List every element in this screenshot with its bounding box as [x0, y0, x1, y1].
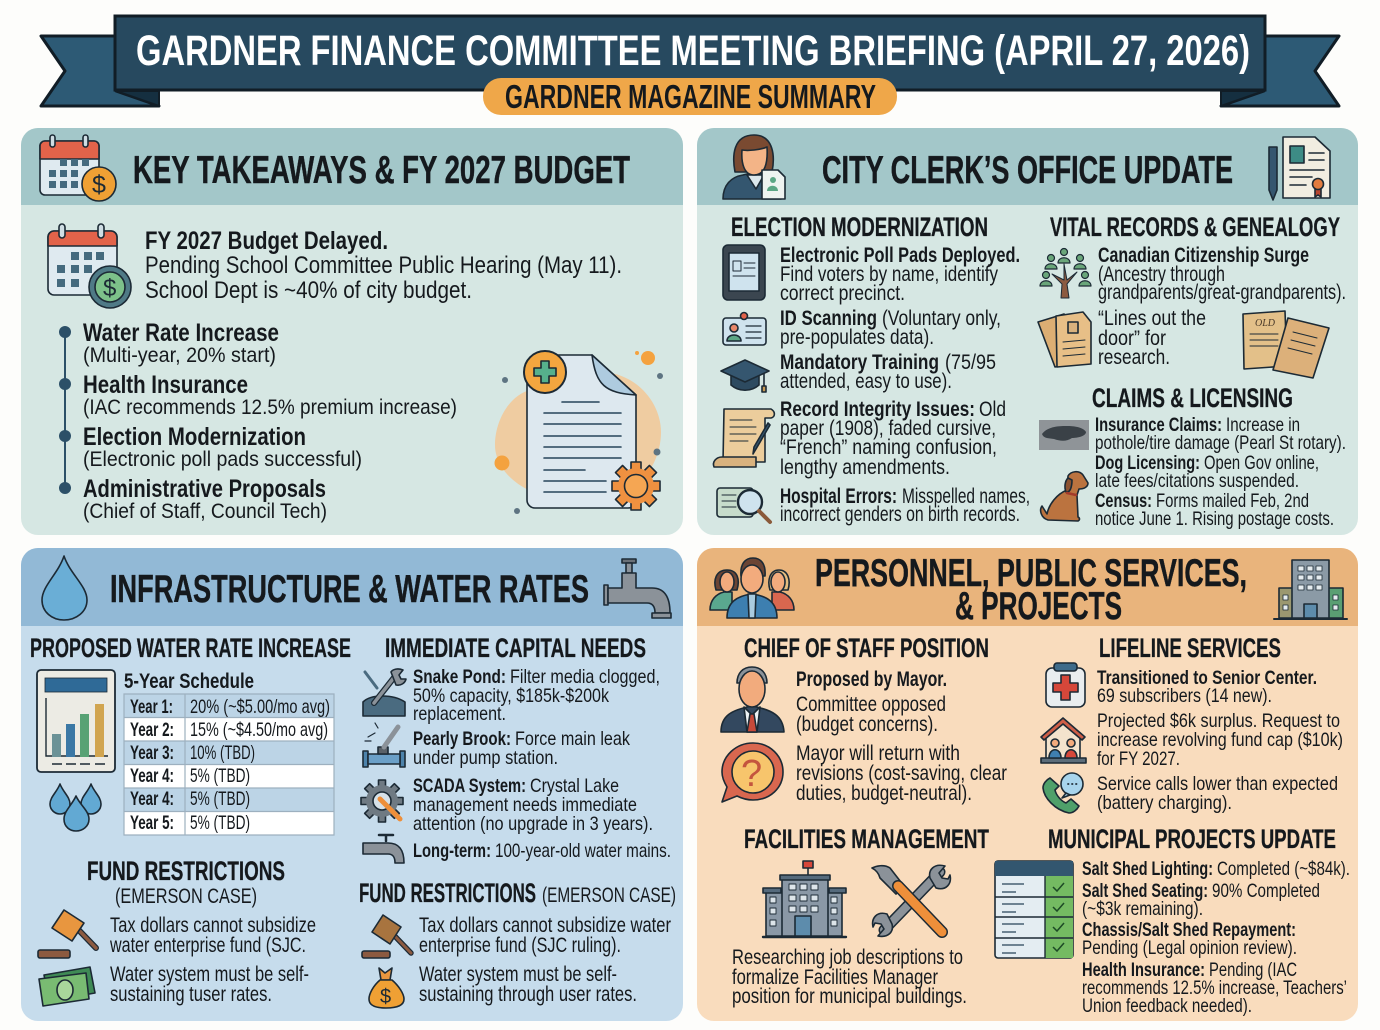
text: hospital errors: Hospital Errors:: [780, 484, 897, 508]
text: mayor revisions: duties, budget-neutral).: [796, 782, 972, 805]
timeline: Administrative Proposals: [83, 475, 326, 503]
text: hospital errors: incorrect genders on birth records.: [780, 503, 1020, 526]
text: insurance claims: Insurance Claims:: [1095, 414, 1222, 436]
icon: crossed hammer and wrench: [872, 865, 950, 936]
text: dog licensing: [1095, 452, 1319, 492]
text: mandatory training: (75/95: [945, 351, 996, 374]
subheading: proposed water rate increase: PROPOSED WATER RATE INCREASE: [30, 633, 351, 663]
text: budget delayed: FY 2027 Budget Delayed.: [145, 227, 388, 255]
text: dog licensing: Open Gov online,: [1204, 452, 1319, 474]
text: self-sustaining left: [110, 963, 309, 1006]
icon: money bag: $: [380, 986, 391, 1008]
text: tax dollars left: water enterprise fund (SJC.: [109, 934, 306, 957]
text: record integrity: lengthy amendments.: [780, 456, 950, 479]
icon: gavel: [38, 910, 96, 958]
icon: medical alert kit: [1046, 663, 1085, 707]
icon: question bubble: ?: [741, 753, 762, 795]
timeline: (Multi-year, 20% start): [83, 344, 276, 367]
icon: scroll and quill: [713, 409, 774, 467]
text: lines out the door: “Lines out the: [1098, 307, 1206, 330]
text: salt shed seating: 90% Completed: [1212, 880, 1320, 902]
text: self-sustaining left: Water system must be self-: [110, 963, 309, 986]
text: proposed by mayor: [796, 667, 947, 736]
icon: paper records: [1038, 312, 1091, 367]
text: snake pond: replacement.: [413, 703, 506, 725]
text: service calls: (battery charging).: [1097, 792, 1232, 814]
text: self-sustaining right: [419, 963, 637, 1006]
text: tax dollars right: Tax dollars cannot subsidize water: [419, 914, 671, 937]
text: snake pond: [413, 666, 660, 725]
text: service calls: Service calls lower than expected: [1097, 773, 1338, 795]
text: surplus: [1097, 710, 1343, 770]
icon: SCADA gear and wrench: [361, 780, 403, 822]
text: self-sustaining right: sustaining through user rates.: [419, 983, 637, 1006]
table: 5-year schedule: Year 2:: [130, 719, 174, 741]
text: pearly brook: [413, 728, 630, 769]
text: poll pads: [780, 243, 1020, 305]
text: tax dollars right: enterprise fund (SJC ruling).: [419, 934, 621, 957]
subheading: fund restrictions left: (EMERSON CASE): [115, 885, 257, 908]
text: snake pond: 50% capacity, $185k-$200k: [413, 685, 609, 707]
icon: tablet: [723, 245, 765, 300]
heading: KEY TAKEAWAYS & FY 2027 BUDGET: [133, 149, 630, 192]
text: mandatory training: [780, 350, 996, 393]
text: hospital errors: [780, 484, 1030, 526]
text: record integrity: Record Integrity Issues:: [780, 397, 975, 421]
text: facilities manager: formalize Facilities Manager: [732, 966, 938, 989]
text: poll pads: Electronic Poll Pads Deployed.: [780, 243, 1020, 267]
text: surplus: for FY 2027.: [1097, 748, 1180, 770]
text: tax dollars left: [109, 914, 316, 957]
subheading: fund restrictions right: (EMERSON CASE): [542, 884, 676, 907]
icon: calendar with dollar coin: [40, 135, 116, 201]
icon: pothole: [1039, 420, 1089, 450]
icon: magnifier over record: [717, 488, 770, 522]
subheading: election modernization: ELECTION MODERNIZATION: [731, 212, 988, 242]
icon: city buildings: [1274, 560, 1347, 619]
text: ID scanning: pre-populates data).: [780, 326, 934, 349]
icon: bar chart report: [37, 670, 115, 772]
text: proposed by mayor: (budget concerns).: [796, 713, 938, 736]
text: proposed by mayor: Committee opposed: [796, 693, 946, 716]
subheading: fund restrictions left: [87, 856, 285, 908]
timeline: (Electronic poll pads successful): [83, 448, 362, 471]
text: mayor revisions: Mayor will return with: [796, 742, 960, 765]
text: lines out the door: [1098, 307, 1206, 369]
subheading: immediate capital needs: IMMEDIATE CAPITAL NEEDS: [385, 633, 646, 663]
timeline: Water Rate Increase: [83, 319, 279, 347]
subheading: fund restrictions right: FUND RESTRICTIONS: [359, 878, 536, 908]
text: mayor revisions: revisions (cost-saving, clear: [796, 762, 1007, 785]
icon: water drops: [50, 784, 101, 831]
subheading: lifeline services: LIFELINE SERVICES: [1099, 633, 1281, 663]
icon: money bills: [39, 967, 95, 1006]
text: budget delayed: [145, 227, 622, 304]
icon: budget calendar: [48, 224, 131, 308]
text: scada system: [413, 775, 653, 835]
text: scada system: SCADA System:: [413, 775, 526, 797]
heading: & PROJECTS: [955, 585, 1122, 628]
text: long-term mains: 100-year-old water mains.: [495, 840, 671, 862]
table: 5-year schedule: 5% (TBD): [190, 788, 250, 810]
table: 5-year schedule: 15% (~$4.50/mo avg): [190, 719, 328, 741]
text: record integrity: Old: [979, 398, 1006, 421]
icon: municipal building: [763, 861, 846, 937]
text: mandatory training: attended, easy to use).: [780, 370, 952, 393]
icon: money bag: [369, 968, 404, 1008]
text: record integrity: paper (1908), faded cursive,: [780, 417, 996, 440]
text: census: Forms mailed Feb, 2nd: [1156, 490, 1309, 512]
icon: ID card: [723, 312, 766, 345]
text: chassis repayment: Chassis/Salt Shed Repayment:: [1082, 919, 1296, 941]
text: mayor revisions: [796, 742, 1007, 805]
icon: question bubble: [722, 743, 783, 802]
panel: infrastructure and water rates: [21, 548, 683, 1021]
text: chassis repayment: [1082, 919, 1297, 959]
text: ID scanning: (Voluntary only,: [882, 307, 1001, 330]
panel: personnel, public services and projects: [697, 548, 1358, 1021]
subheading: claims and licensing: CLAIMS & LICENSING: [1092, 383, 1293, 413]
text: facilities manager: position for municipal buildings.: [732, 985, 967, 1008]
text: record integrity: [780, 397, 1006, 479]
icon: wrench and filter: [363, 669, 406, 716]
text: citizenship surge: Canadian Citizenship Surge: [1098, 243, 1309, 267]
text: scada system: management needs immediate: [413, 794, 637, 816]
text: proposed by mayor: Proposed by Mayor.: [796, 667, 947, 691]
icon: faucet: [604, 559, 671, 618]
text: lines out the door: door” for: [1098, 327, 1166, 350]
subheading: fund restrictions left: FUND RESTRICTIONS: [87, 856, 285, 886]
table: 5-year schedule: Year 5:: [130, 812, 174, 834]
icon: checklist: [995, 861, 1073, 958]
icon: businessman: [721, 667, 784, 732]
table: 5-year schedule: [124, 669, 334, 835]
text: snake pond: Filter media clogged,: [510, 666, 660, 688]
table: 5-year schedule: Year 1:: [130, 696, 173, 718]
table: 5-year schedule: 5% (TBD): [190, 812, 250, 834]
text: citizenship surge: [1098, 243, 1346, 304]
text: long-term mains: [413, 840, 671, 862]
timeline: Election Modernization: [83, 423, 306, 451]
table: 5-year schedule: Year 4:: [130, 788, 174, 810]
timeline: (Chief of Staff, Council Tech): [83, 500, 327, 523]
text: senior center: Transitioned to Senior Center.: [1097, 667, 1317, 689]
icon: budget calendar: $: [103, 275, 116, 302]
icon: water drop: [42, 556, 87, 620]
icon: calendar with dollar coin: $: [92, 171, 106, 199]
subheading: chief of staff: CHIEF OF STAFF POSITION: [744, 633, 989, 663]
text: long-term mains: Long-term:: [413, 840, 491, 862]
text: self-sustaining left: sustaining tuser rates.: [110, 983, 272, 1006]
text: salt shed lighting: [1082, 858, 1350, 880]
text: dog licensing: Dog Licensing:: [1095, 452, 1200, 474]
title banner: [41, 16, 1339, 106]
text: salt shed seating: Salt Shed Seating:: [1082, 880, 1208, 902]
text: health insurance: Pending (IAC: [1209, 959, 1297, 981]
text: record integrity: “French” naming confusion,: [780, 436, 997, 459]
icon: document with plus and gear: [494, 351, 663, 514]
text: chassis repayment: Pending (Legal opinion review).: [1082, 937, 1297, 959]
icon: group of people: [710, 558, 794, 618]
text: hospital errors: Misspelled names,: [902, 485, 1030, 508]
text: insurance claims: Increase in: [1226, 414, 1300, 436]
text: scada system: attention (no upgrade in 3 years).: [413, 813, 653, 835]
text: health insurance: [1082, 959, 1347, 1017]
icon: family tree: [1040, 248, 1091, 298]
text: insurance claims: [1095, 414, 1346, 454]
text: census: Census:: [1095, 490, 1152, 512]
text: ID scanning: [780, 306, 1001, 349]
icon: pen and certificate: [1269, 137, 1330, 200]
icon: dog: [1041, 472, 1088, 521]
text: poll pads: correct precinct.: [780, 282, 905, 305]
text: census: [1095, 490, 1334, 530]
timeline: Health Insurance: [83, 371, 248, 399]
panel: city clerk office update: [697, 128, 1358, 535]
table: 5-year schedule: 5% (TBD): [190, 765, 250, 787]
text: budget delayed: Pending School Committee Public Hearing (May 11).: [145, 252, 622, 279]
subheading: facilities management: FACILITIES MANAGEMENT: [744, 824, 989, 854]
icon: tap: [363, 835, 404, 863]
text: ID scanning: ID Scanning: [780, 306, 877, 330]
subtitle pill: GARDNER MAGAZINE SUMMARY: [505, 78, 876, 115]
table: 5-year schedule: 20% (~$5.00/mo avg): [190, 696, 330, 718]
text: salt shed seating: [1082, 880, 1320, 920]
text: snake pond: Snake Pond:: [413, 666, 506, 688]
table: 5-year schedule: Year 3:: [130, 742, 174, 764]
table: 5-year schedule: 10% (TBD): [190, 742, 255, 764]
icon: old documents: [1243, 311, 1329, 378]
icon: leaking pipe valve: [363, 723, 405, 767]
text: pearly brook: Pearly Brook:: [413, 728, 511, 750]
text: poll pads: Find voters by name, identify: [780, 263, 998, 286]
text: salt shed lighting: Salt Shed Lighting:: [1082, 858, 1213, 880]
panel: key takeaways and budget: [21, 128, 683, 535]
text: tax dollars right: [419, 914, 671, 957]
text: lines out the door: research.: [1098, 346, 1170, 369]
icon: old documents: OLD: [1255, 318, 1276, 329]
table: 5-year schedule: Year 4:: [130, 765, 174, 787]
text: tax dollars left: Tax dollars cannot subsidize: [110, 914, 316, 937]
text: self-sustaining right: Water system must be self-: [419, 963, 617, 986]
icon: graduation cap: [721, 360, 769, 392]
text: pearly brook: under pump station.: [413, 747, 558, 769]
icon: clerk woman: [723, 135, 785, 199]
heading: INFRASTRUCTURE & WATER RATES: [110, 568, 589, 611]
text: facilities manager: [732, 946, 967, 1008]
heading: [815, 552, 1247, 628]
text: health insurance: Union feedback needed).: [1082, 995, 1252, 1017]
text: service calls: [1097, 773, 1338, 814]
text: mandatory training: Mandatory Training: [780, 350, 939, 374]
icon: house with people: [1041, 718, 1086, 763]
table: 5-year schedule: 5-Year Schedule: [124, 669, 254, 693]
text: budget delayed: School Dept is ~40% of city budget.: [145, 277, 472, 304]
text: facilities manager: Researching job descriptions to: [732, 946, 963, 969]
text: scada system: Crystal Lake: [530, 775, 619, 797]
icon: gavel right: [362, 915, 411, 958]
timeline: [59, 319, 457, 523]
timeline: (IAC recommends 12.5% premium increase): [83, 396, 457, 419]
text: senior center: [1097, 667, 1317, 707]
text: dog licensing: late fees/citations suspended.: [1095, 470, 1299, 492]
text: health insurance: Health Insurance:: [1082, 959, 1205, 981]
icon: phone with speech bubble: [1043, 773, 1083, 813]
text: pearly brook: Force main leak: [515, 728, 630, 750]
text: salt shed seating: (~$3k remaining).: [1082, 898, 1203, 920]
text: senior center: 69 subscribers (14 new).: [1097, 685, 1272, 707]
text: citizenship surge: (Ancestry through: [1098, 263, 1225, 286]
